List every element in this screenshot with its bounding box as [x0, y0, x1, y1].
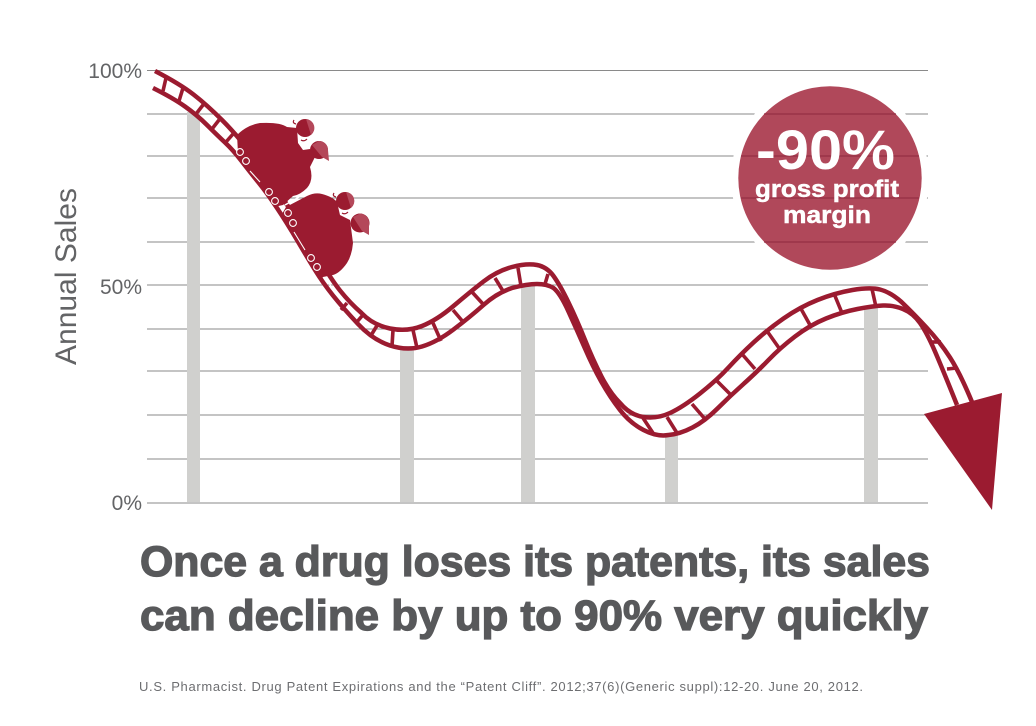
callout caption line 2: margin	[783, 202, 871, 229]
y axis title: Annual Sales	[50, 188, 83, 365]
y axis label: 100%: 100%	[88, 60, 142, 83]
source note: U.S. Pharmacist. Drug Patent Expirations and the “Patent Cliff”. 2012;37(6)(Generic suppl):12-20. June 20, 2012.	[139, 679, 863, 694]
car 2 body	[282, 193, 353, 281]
callout figure: -90%	[756, 118, 895, 181]
arrowhead	[924, 393, 1002, 510]
cross ties	[163, 78, 957, 433]
upper rail	[155, 71, 972, 418]
headline: can decline by up to 90% very quickly	[140, 592, 928, 640]
callout caption line 1: gross profit	[755, 176, 899, 203]
gridlines	[147, 70, 928, 503]
support columns	[187, 112, 878, 502]
track highlights	[250, 171, 339, 297]
roller coaster track	[153, 71, 972, 435]
gap between cars	[285, 197, 299, 205]
car 1 body	[237, 123, 315, 207]
y axis label: 0%: 0%	[112, 492, 142, 515]
lower rail	[153, 88, 957, 435]
callout disc	[738, 86, 922, 270]
wheels	[237, 149, 320, 270]
rider heads, car 2	[333, 192, 370, 235]
lines through disc	[741, 114, 919, 242]
y axis label: 50%: 50%	[100, 276, 142, 299]
rider heads, car 1	[293, 119, 329, 161]
headline	[140, 538, 930, 640]
callout halo	[731, 79, 929, 277]
headline: Once a drug loses its patents, its sales	[140, 538, 930, 586]
callout: -90% gross profit margin	[731, 79, 929, 277]
chart: annual sales roller coaster	[50, 60, 1002, 515]
coaster cars with riders	[237, 119, 370, 297]
